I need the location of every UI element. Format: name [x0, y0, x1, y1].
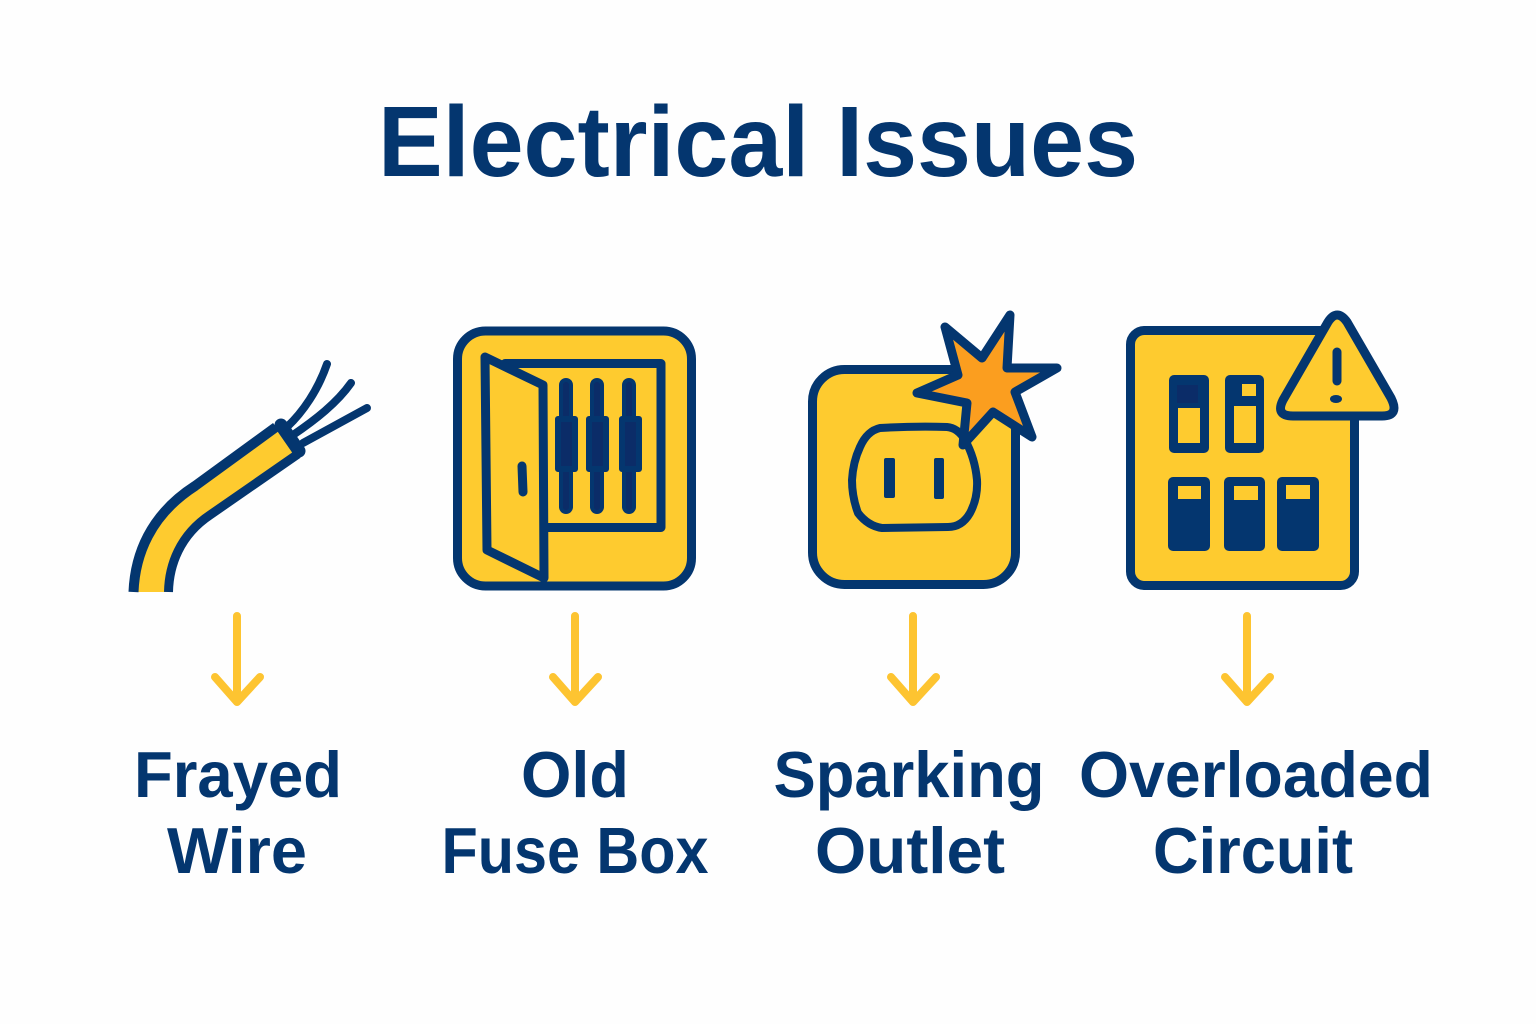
label: old fuse box	[442, 738, 708, 887]
icon: overloaded circuit	[1130, 315, 1394, 586]
arrow: frayed wire	[215, 616, 260, 702]
icon: frayed wire	[134, 364, 367, 592]
label: frayed wire: Frayed	[134, 738, 342, 811]
label: overloaded circuit: Overloaded	[1079, 738, 1433, 811]
arrow: overloaded circuit	[1225, 616, 1270, 702]
label: old fuse box: Fuse Box	[442, 814, 708, 887]
arrow: sparking outlet	[891, 616, 936, 702]
label: sparking outlet	[774, 738, 1044, 887]
label: overloaded circuit	[1079, 738, 1433, 887]
label: sparking outlet: Sparking	[774, 738, 1044, 811]
bottom breakers	[1168, 477, 1319, 551]
arrow: old fuse box	[553, 616, 598, 702]
top breakers	[1169, 375, 1264, 453]
icon: old fuse box	[458, 331, 692, 586]
label: overloaded circuit: Circuit	[1153, 814, 1353, 887]
label: sparking outlet: Outlet	[815, 814, 1005, 887]
label: old fuse box: Old	[521, 738, 629, 811]
label: frayed wire: Wire	[167, 814, 307, 887]
title: Electrical Issues	[378, 86, 1138, 198]
label: frayed wire	[134, 738, 342, 887]
icon: sparking outlet	[812, 315, 1057, 584]
